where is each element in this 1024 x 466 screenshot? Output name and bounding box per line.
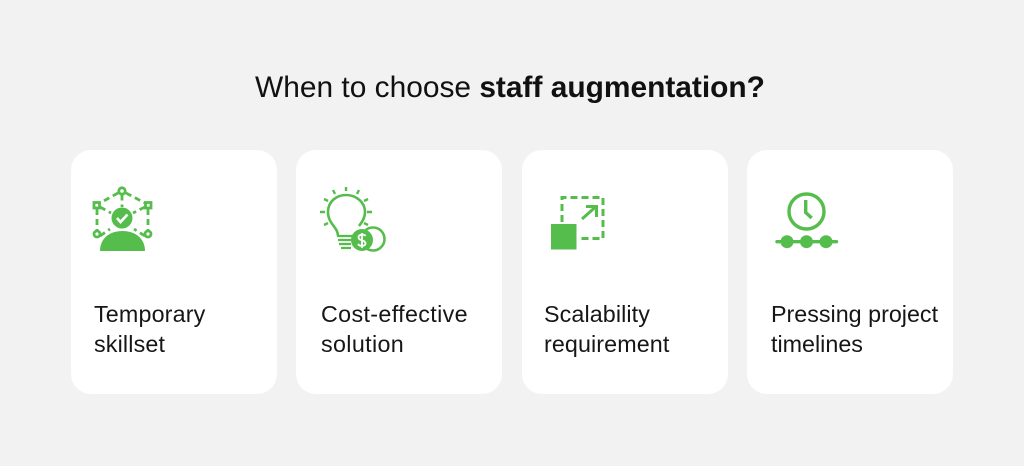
label: scalability requirement: Scalability bbox=[544, 301, 650, 327]
icon: clock on timeline bbox=[777, 194, 836, 248]
panel: pressing project timelines bbox=[747, 150, 953, 394]
label: temporary skillset: skillset bbox=[94, 331, 165, 357]
icon: light bulb with coins bbox=[320, 187, 384, 251]
icon: person with network bbox=[94, 188, 151, 251]
title: When to choose staff augmentation? bbox=[255, 71, 765, 104]
label: scalability requirement bbox=[544, 301, 670, 357]
panel: temporary skillset bbox=[71, 150, 277, 394]
panel: cost-effective solution bbox=[296, 150, 502, 394]
label: pressing project timelines bbox=[771, 301, 938, 357]
label: pressing project timelines: timelines bbox=[771, 331, 863, 357]
label: pressing project timelines: Pressing project bbox=[771, 301, 938, 327]
icon: scaling squares bbox=[551, 198, 603, 250]
label: cost-effective solution bbox=[321, 301, 468, 357]
label: cost-effective solution: Cost-effective bbox=[321, 301, 468, 327]
label: cost-effective solution: solution bbox=[321, 331, 404, 357]
label: scalability requirement: requirement bbox=[544, 331, 669, 357]
label: temporary skillset: Temporary bbox=[94, 301, 205, 327]
label: temporary skillset bbox=[94, 301, 206, 357]
panel: scalability requirement bbox=[522, 150, 728, 394]
